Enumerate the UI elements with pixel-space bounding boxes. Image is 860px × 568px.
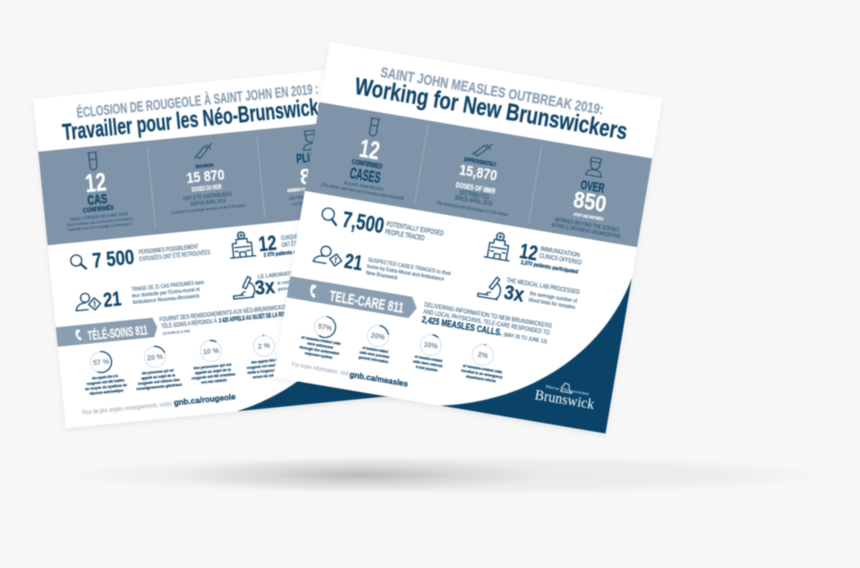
- text: 20 % caption: renseignements généraux: [136, 383, 183, 391]
- stat: doses: La moyenne provinciale annuelle est de 5 200 doses.: [171, 203, 246, 215]
- stat: doses: 15 870: [186, 166, 225, 187]
- text: 10 % caption: vers leur médecin: [201, 378, 228, 385]
- text: Télé-Soins description: (DU 26 MAI AU 13 JUIN): [163, 328, 190, 336]
- text: 20 % caption: des personnes qui ont: [142, 368, 174, 376]
- icon: person alert: [313, 245, 344, 267]
- stat: 12 clinics: [257, 226, 331, 259]
- stat: 3x lab: the average number of: [529, 291, 578, 305]
- text: 20% caption: general information: [358, 354, 389, 364]
- donut: 2%: 2%: [477, 352, 489, 360]
- logo: New Brunswick: Brunswick: [534, 387, 596, 413]
- icon: syringe: [193, 144, 213, 159]
- text: 57 % caption: rougeole ont été traités: [86, 378, 125, 386]
- text: Tele-Care description: (MAY 26 TO JUNE 13): [503, 332, 548, 345]
- stat: confirmed cases: CONFIRMED: [351, 159, 383, 171]
- logo: New Brunswick: New Nouveau: [545, 384, 591, 396]
- donut: 10 %: [199, 339, 222, 362]
- stat: 3x lab: pour la rougeole: [278, 282, 327, 293]
- icon: magnifier: [70, 254, 86, 270]
- text: Tele-Care description: AND LOCAL PHYSICIANS, TELE-CARE RESPONDED TO: [423, 308, 550, 337]
- text: 2 % caption: renvoi du médecin: [253, 373, 283, 380]
- text: 2% caption: department referral: [466, 373, 496, 383]
- stat: 7 500 traced: 7 500: [91, 246, 135, 273]
- text: 10% caption: [412, 353, 444, 373]
- stat: cases: CONFIRMÉS: [82, 202, 115, 215]
- text: 57% caption: of measles-related calls: [301, 334, 341, 346]
- text: 10 % caption: des personnes qui ont: [193, 363, 232, 370]
- stat: 7 500 traced: EXPOSÉES ONT ÉTÉ RETROUVÉES: [139, 247, 211, 263]
- donut: 20 %: [144, 345, 167, 368]
- text: 57% caption: were addressed: [306, 340, 334, 350]
- donut: 57 %: 57 %: [93, 359, 110, 367]
- stat: cases: 12: [84, 168, 108, 198]
- banner: Tele-Care 811: TELE-CARE 811: [328, 289, 405, 317]
- stat: 3x lab: THE MEDICAL LAB PROCESSED: [506, 278, 581, 296]
- stat: cases: DANS LA RÉGION DE SAINT JOHN: [70, 210, 128, 222]
- text: Télé-Soins description: [159, 302, 302, 336]
- footer: French link: gnb.ca/rougeole: [173, 392, 237, 407]
- stat: cases: (Dont le premier cas, la personne a contracté la: [67, 217, 133, 227]
- stat: 21 triaged: 21: [102, 288, 122, 312]
- footer: link: For more information, visit: [291, 362, 349, 378]
- stat: 21 triaged: leur domicile par l'Extra-mural et: [132, 287, 200, 300]
- donut: 57 %: [90, 351, 113, 374]
- text: 20 % caption: rougeole ont obtenu des: [138, 378, 180, 386]
- stat: staff: WITHIN 11 DIFFERENT ORGANIZATIONS: [551, 223, 621, 240]
- stat: 7,500 traced: [341, 207, 446, 249]
- stat: staff: PLUS DE: [295, 147, 335, 166]
- heading: title: Working for New Brunswickers: [353, 73, 629, 146]
- stat: cases: [61, 166, 134, 232]
- banner: Télé-Soins 811: TÉLÉ-SOINS 811: [87, 322, 148, 343]
- panel: stats band: [305, 102, 652, 247]
- text: 2 % caption: rougeole ont mené à une: [247, 362, 287, 370]
- stat: 21 suspected: home by Extra-Mural and Ambulance: [366, 264, 445, 283]
- stat: 3x lab: [502, 278, 581, 316]
- banner: Tele-Care 811: [287, 276, 419, 319]
- stat: 21 suspected: SUSPECTED CASES TRIAGED to their: [368, 257, 451, 277]
- stat: cases: CAS: [87, 190, 108, 208]
- donut: 10%: [419, 333, 443, 357]
- stat: 21 triaged: TRIAGE DE 21 CAS PRÉSUMÉS dans: [131, 279, 205, 293]
- stat: 7,500 traced: 7,500: [341, 207, 386, 238]
- ground shadow: [60, 455, 832, 495]
- icon: test tube: [88, 152, 98, 170]
- stat: doses of MMR: 15,870: [458, 162, 498, 185]
- panel: French stats band: [38, 119, 376, 245]
- icon: syringe: [472, 142, 492, 158]
- text: 57 % caption: au moyen du système de: [85, 383, 127, 391]
- icon: hospital: [484, 231, 513, 261]
- stat: confirmed cases: [321, 129, 414, 201]
- stat: 3x lab: le nombre moyen de tests: [277, 276, 326, 287]
- stat: doses of MMR: DISTRIBUTED: [459, 190, 490, 201]
- stat: staff: [284, 146, 351, 208]
- stat: 7 500 traced: PERSONNES POSSIBLEMENT: [138, 243, 199, 256]
- text: 2 % caption: des appels liés à la: [251, 358, 282, 365]
- icon: hospital: [228, 231, 256, 258]
- stat: 12 clinics: [517, 240, 584, 276]
- text: 57 % caption: [84, 373, 128, 396]
- stat: 21 triaged: Ambulance Nouveau-Brunswick: [132, 293, 200, 306]
- stat: staff: 850: [572, 186, 608, 217]
- text: 2% caption: of measles-related calls: [462, 363, 503, 374]
- footer: French link: [82, 392, 237, 417]
- stat: 21 suspected: 21: [343, 250, 365, 275]
- footer: link: [291, 360, 409, 389]
- icon: person alert: [75, 292, 101, 312]
- stat: 7 500 traced: [91, 238, 211, 273]
- icon: magnifier: [321, 207, 339, 225]
- stat: confirmed cases: IN SAINT JOHN REGION: [343, 180, 384, 193]
- stat: 7,500 traced: POTENTIALLY EXPOSED: [386, 219, 445, 238]
- text: 10% caption: to their physician: [416, 364, 439, 373]
- text: 10% caption: calls were referred: [413, 358, 443, 368]
- text: 2% caption: [460, 363, 504, 385]
- donut: 57%: 57%: [317, 323, 333, 333]
- donut: 20 %: 20 %: [147, 354, 164, 362]
- text: 57 % caption: des appels liés à la: [92, 374, 119, 380]
- stat: staff: [551, 173, 630, 240]
- text: Tele-Care description: DELIVERING INFORMATION TO NEW BRUNSWICKERS: [424, 302, 553, 330]
- text: Tele-Care description: [421, 302, 553, 346]
- panel: English infographic card (front): [273, 42, 662, 434]
- footer: link: gnb.ca/measles: [349, 370, 409, 389]
- icon: nurse: [302, 130, 319, 150]
- text: 57% caption: [298, 334, 342, 361]
- stat: 12 clinics: 12: [518, 240, 539, 265]
- text: Télé-Soins description: 2 425 APPELS AU SUJET DE LA ROUGEOLE: [219, 309, 301, 325]
- stat: doses of MMR: SINCE APRIL 2019: [454, 196, 493, 208]
- banner: Télé-Soins 811: [56, 317, 158, 347]
- stat: doses: ENVIRON: [195, 162, 214, 169]
- text: 20% caption: [358, 344, 391, 364]
- stat: confirmed cases: (The whole case was out-of-country travel acquired): [321, 182, 405, 201]
- stat: staff: AU SEIN D'ONZE ORGANISMES: [292, 196, 347, 208]
- stat: 21 triaged: [102, 279, 206, 312]
- stat: 3x lab: 3x: [254, 276, 276, 300]
- text: 2 % caption: [246, 357, 288, 380]
- stat: 12 clinics: CLINIQUES DE VACCINATION: [281, 230, 329, 242]
- stat: doses of MMR: DOSES OF MMR: [455, 182, 496, 196]
- stat: 3x lab: LE LABORATOIRE A TRAITÉ: [257, 267, 328, 281]
- text: 57% caption: through the automated: [299, 344, 340, 356]
- stat: 12 clinics: 12: [257, 232, 278, 256]
- text: 20 % caption: appelé au sujet de la: [141, 373, 176, 381]
- navy corner: [222, 240, 396, 411]
- text: 20 % caption: [135, 368, 183, 391]
- text: 10 % caption: rougeole ont été orientées: [191, 372, 236, 381]
- text: Télé-Soins description: TÉLÉ-SOINS A RÉPONDU À: [161, 318, 217, 330]
- stat: 12 clinics: 2,370 patients participated: [520, 260, 578, 276]
- donut: 2%: [471, 343, 495, 367]
- stat: staff: WORKED BEYOND THE SCENES: [554, 217, 620, 234]
- stat: doses: DEPUIS AVRIL 2019: [190, 198, 226, 208]
- heading: subtitle: SAINT JOHN MEASLES OUTBREAK 2019:: [379, 64, 605, 119]
- stat: confirmed cases: 12: [357, 135, 382, 166]
- text: 20% caption: of measles-related: [362, 345, 389, 354]
- stat: staff: MEMBRES DU PERSONNEL ET PARTENAIRES: [287, 182, 349, 193]
- stat: 12 clinics: IMMUNIZATION: [540, 246, 581, 259]
- donut: 10 %: 10 %: [203, 348, 220, 356]
- stat: doses: [167, 160, 246, 215]
- footer: French link: Pour de plus amples renseignements, visitez: [82, 402, 172, 417]
- text: 20% caption: calls were provided: [359, 349, 390, 359]
- stat: 3x lab: 3x: [502, 282, 526, 307]
- stat: 12 clinics: 2 370 patients ont participé: [263, 247, 320, 259]
- stat: doses of MMR: [436, 154, 516, 217]
- text: 57% caption: response system: [304, 350, 333, 360]
- icon: microscope: [478, 275, 503, 300]
- stat: staff: ONT TRAVAILLÉ DANS LES COULISSES: [289, 189, 349, 202]
- donut: 2 %: 2 %: [258, 343, 271, 351]
- stat: doses: DOSES DU ROR: [191, 184, 222, 194]
- heading: French subtitle: ÉCLOSION DE ROUGEOLE À SAINT JOHN EN 2019 :: [76, 81, 319, 122]
- donut: 20%: 20%: [370, 332, 386, 342]
- stat: doses of MMR: APPROXIMATELY: [463, 157, 497, 169]
- donut: 57%: [313, 315, 337, 339]
- text: Télé-Soins description: FOURNIT DES RENSEIGNEMENTS AUX NÉO-BRUNSWICKOIS: [159, 304, 289, 323]
- donut: 2 %: [252, 334, 275, 357]
- stat: 7,500 traced: PEOPLE TRACED: [384, 227, 426, 243]
- icon: test tube: [368, 118, 380, 137]
- icon: microscope: [232, 276, 255, 299]
- stat: staff: 850: [299, 162, 335, 190]
- stat: doses: ONT ÉTÉ DISTRIBUÉES: [183, 191, 233, 203]
- text: Tele-Care description: 2,425 MEASLES CALLS.: [421, 314, 503, 338]
- stat: confirmed cases: CASES: [348, 165, 382, 187]
- stat: 21 suspected: [343, 250, 452, 290]
- stat: staff: OVER: [580, 177, 606, 196]
- panel: French infographic card (back): [33, 66, 396, 428]
- icon: nurse: [585, 157, 604, 177]
- donut: 10%: 10%: [423, 341, 439, 351]
- stat: staff: STAFF AND PARTNERS: [573, 212, 604, 222]
- stat: 21 suspected: New Brunswick: [365, 270, 398, 282]
- stat: 12 clinics: CLINICS OFFERED: [539, 252, 582, 267]
- text: 57 % caption: réponse automatique: [89, 388, 124, 396]
- stat: 3x lab: blood tests for measles: [528, 297, 576, 311]
- stat: cases: maladie lors d'un voyage à l'étranger.): [68, 222, 133, 232]
- text: 2% caption: resulted in an emergency: [461, 368, 504, 380]
- stat: 3x lab: [253, 267, 330, 300]
- donut: 20%: [366, 324, 390, 348]
- text: 10 % caption: [190, 362, 236, 386]
- text: 2 % caption: visite à l'urgence par un: [247, 367, 288, 375]
- stat: doses of MMR: The annual provincial average is 5,200 doses: [436, 200, 508, 217]
- text: 10% caption: of measles-related: [414, 354, 443, 363]
- navy corner: [441, 250, 632, 434]
- text: 10 % caption: appelé au sujet de la: [195, 368, 232, 375]
- stat: 12 clinics: ONT ÉTÉ OFFERTES: [281, 236, 322, 249]
- heading: French title: Travailler pour les Néo-Brunswickois: [61, 91, 342, 145]
